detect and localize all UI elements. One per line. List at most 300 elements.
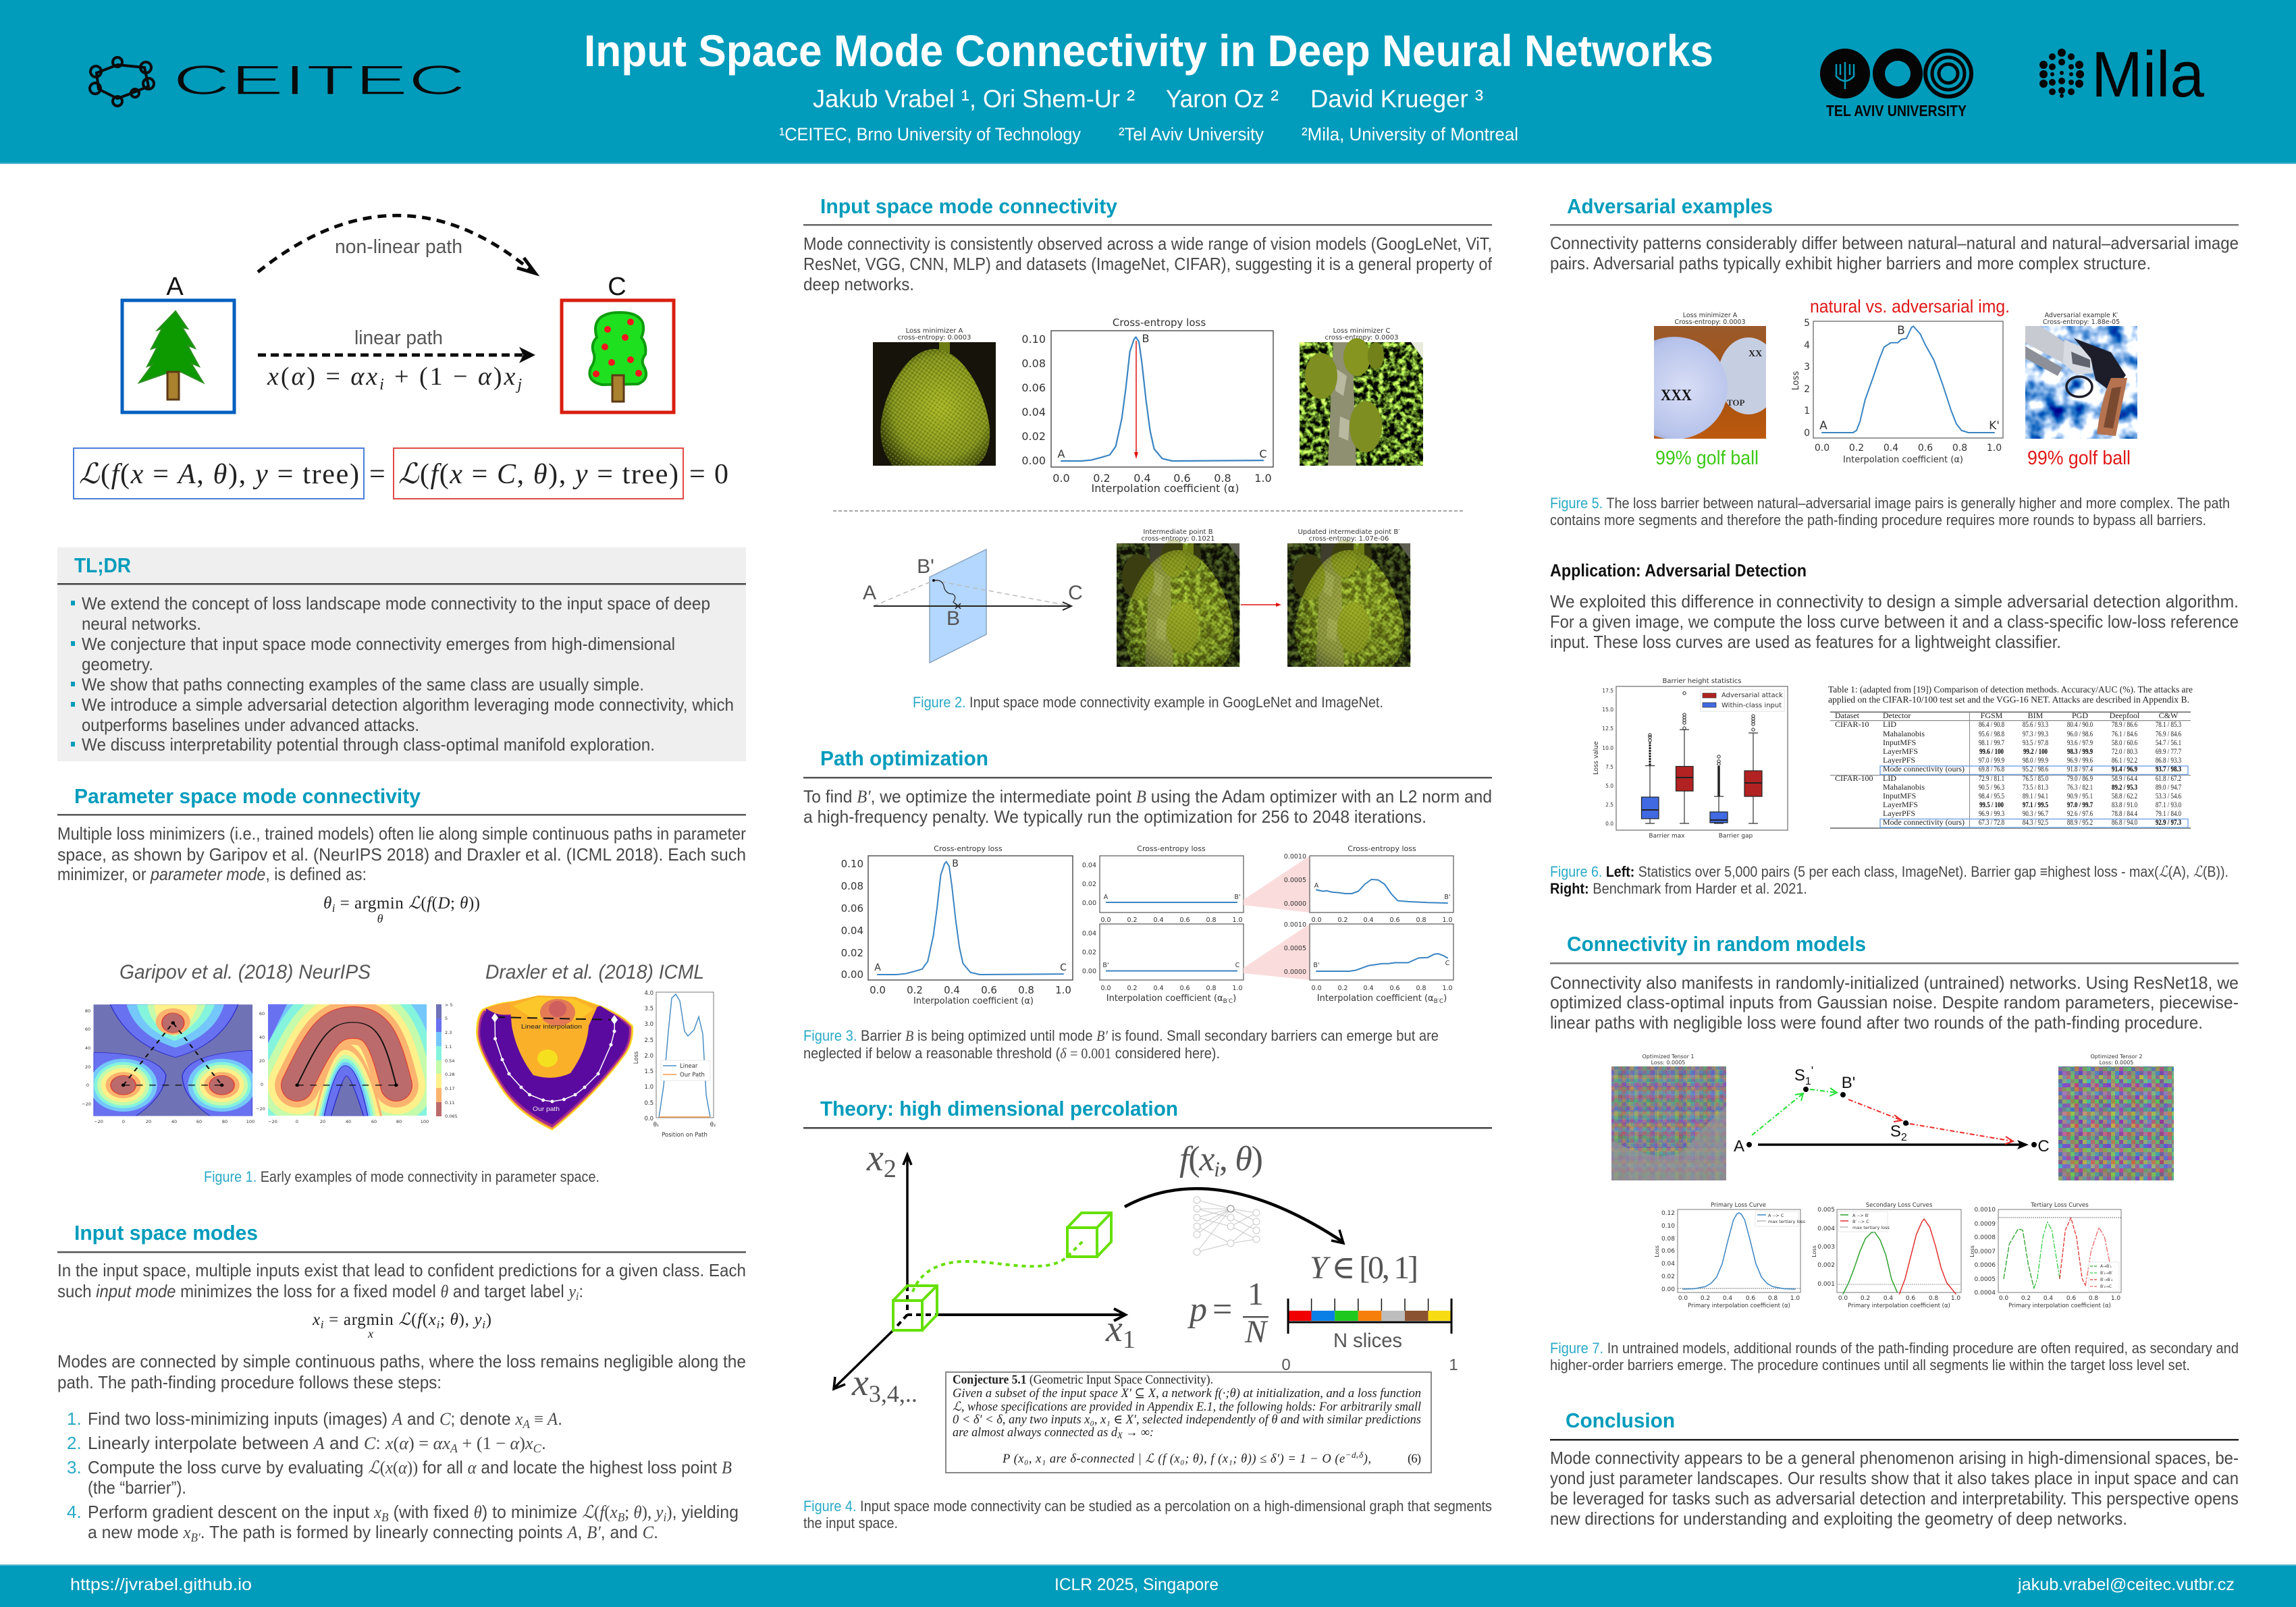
chart: Draxler loss along path: 2.5	[644, 1037, 653, 1044]
formula: interpolation: α)x	[478, 362, 515, 391]
panel: intro diagram	[74, 215, 728, 499]
conjecture box: ℒ, whose specifications are provided in Appendix E.1, the following holds: For arbitrarily small	[953, 1400, 1421, 1414]
table 1: detection methods: 86.8 / 94.0	[2112, 819, 2137, 827]
figure caption 1: Figure 1. Early examples of mode connectivity in parameter space.	[204, 1168, 599, 1185]
bullet list: We introduce a simple adversarial detection algorithm leveraging mode connectivity, which	[82, 694, 734, 715]
table 1: detection methods: 54.7 / 56.1	[2156, 739, 2181, 747]
formula: loss C: ℒ(f(x = C, θ), y = tree)	[398, 457, 678, 490]
chart: cross-entropy loss: 0.08	[1021, 357, 1046, 370]
numbered steps: A.	[548, 1409, 562, 1429]
formula: loss A: ℒ(f(x = A, θ), y = tree)	[79, 457, 359, 490]
icon: CEITEC molecule	[90, 57, 154, 106]
figure caption 5: Figure 5. The loss barrier between natural–adversarial image pairs is generally higher and more complex. The path	[1550, 495, 2230, 512]
formula: slice probability: 1	[1248, 1276, 1264, 1312]
axes	[834, 1155, 1125, 1389]
logo: Mila	[2039, 38, 2205, 111]
body text: optimized class-optimal inputs from Gaussian noise. Despite random parameters, piecewise-	[1550, 992, 2239, 1012]
numbered steps: Compute the loss curve by evaluating ℒ(x(α)) for all α and locate the highest loss point B	[88, 1457, 732, 1478]
colorbar: > 5	[445, 1002, 453, 1008]
body text: ResNet, VGG, CNN, MLP) and datasets (ImageNet, CIFAR), suggesting it is a general property of	[803, 254, 1493, 274]
numbered steps: θ) to minimize ℒ(f(x	[474, 1502, 618, 1523]
formula: input mode: i	[437, 1318, 440, 1331]
arrow: linear path	[258, 347, 535, 363]
chart: B' to C loss: 0.0	[1100, 985, 1111, 992]
figure caption 3: Figure 3. Barrier B is being optimized until mode B′ is found. Small secondary barriers can emerge but are	[803, 1027, 1439, 1044]
table 1: detection methods: 79.1 / 84.0	[2156, 810, 2181, 818]
chart: zoomed A to B': Cross-entropy loss	[1347, 844, 1416, 853]
body text: space, as shown by Garipov et al. (NeurIPS 2018) and Draxler et al. (ICML 2018). Each such	[57, 844, 746, 865]
chart: Garipov contour right: −20	[268, 1119, 277, 1124]
label: non-linear path: non-linear path	[335, 236, 462, 258]
chart: A to B' loss: 0.2	[1127, 917, 1138, 924]
table 1: detection methods: 95.2 / 98.6	[2023, 765, 2048, 773]
axis labels: 3,4,..	[869, 1380, 917, 1407]
chart: primary loss curve: 1.0	[1790, 1295, 1800, 1302]
numbered steps: (with fixed	[389, 1502, 474, 1522]
chart: A to B' loss: 0.8	[1206, 917, 1217, 924]
table 1: detection methods: 78.8 / 84.4	[2112, 810, 2137, 818]
chart: barrier height boxplot: Barrier max	[1649, 833, 1685, 840]
chart: main loss curve: 0.6	[981, 984, 997, 996]
body text	[57, 823, 746, 884]
table 1: detection methods: 88.9 / 95.2	[2067, 819, 2093, 827]
table 1: detection methods: 83.8 / 91.0	[2112, 801, 2137, 809]
table 1: detection methods: 87.1 / 93.0	[2156, 801, 2181, 809]
chart: zoomed A to B': A	[1314, 882, 1319, 890]
chart: main loss curve: 0.00	[841, 969, 863, 981]
image: golf balls: Cross-entropy: 0.0003	[1674, 319, 1746, 326]
formula: slice probability	[1187, 1276, 1269, 1350]
body text: application: For a given image, we compute the loss curve between it and a class-specific low-loss reference	[1550, 611, 2239, 632]
figure title: Draxler: Draxler et al. (2018) ICML	[485, 961, 704, 983]
table 1: detection methods: 76.9 / 84.6	[2156, 730, 2181, 738]
chart: primary loss curve: 0.02	[1661, 1274, 1675, 1280]
chart: cross-entropy loss: 0.04	[1021, 406, 1046, 418]
chart: Draxler loss along path: 0.5	[644, 1100, 653, 1107]
chart: main loss curve: 0.0	[870, 984, 886, 996]
chart: Garipov contour left: 20	[85, 1064, 90, 1070]
image: golf balls: XX	[1748, 349, 1762, 359]
numbered steps: ;	[624, 1502, 633, 1522]
figure caption 5: contains more segments and therefore the path-finding procedure requires more rounds to bypass all barriers.	[1550, 512, 2206, 528]
numbered steps: (the “barrier”).	[88, 1477, 186, 1498]
image: golf balls: Loss minimizer A	[1683, 312, 1738, 319]
label: network function: θ)	[1235, 1140, 1263, 1178]
bullet list: outperforms baselines under advanced attacks.	[82, 715, 419, 735]
diagram: plane between A and C: B	[946, 607, 960, 630]
image box C with apple tree	[562, 300, 674, 412]
chart: tertiary loss curves: 0.8	[2089, 1295, 2098, 1302]
table 1: detection methods: 98.0 / 99.9	[2023, 757, 2048, 765]
chart: zoomed A to B': 0.4	[1363, 917, 1374, 924]
figure caption 6: Figure 6. Left: Statistics over 5,000 pairs (5 per each class, ImageNet). Barrier gap ≡highest loss - max(ℒ(A), ℒ(B)).	[1550, 863, 2228, 881]
table 1: detection methods: 78.1 / 85.3	[2156, 721, 2181, 729]
table 1: detection methods: 89.0 / 94.7	[2156, 784, 2181, 792]
chart: cross-entropy loss: 1.0	[1254, 472, 1272, 485]
chart: natural vs adversarial loss: 5	[1804, 318, 1810, 329]
heading: Connectivity in random models	[1567, 932, 1866, 956]
diagram: piecewise path	[1734, 1064, 2050, 1155]
chart: barrier height boxplot: Adversarial attack	[1721, 692, 1783, 699]
chart: natural vs adversarial loss	[1791, 318, 2003, 465]
chart: primary loss curve: max tertiary loss	[1768, 1219, 1806, 1224]
image: loss minimizer A: Loss minimizer A	[906, 327, 963, 335]
chart: barrier height boxplot: 17.5	[1602, 688, 1613, 694]
numbered steps: Find two loss-minimizing inputs (images) A and C; denote x	[88, 1409, 523, 1429]
icon: neural network	[1194, 1197, 1260, 1255]
chart: natural vs adversarial loss: A	[1819, 419, 1827, 433]
chart: cross-entropy loss: 0.8	[1214, 472, 1231, 485]
numbered steps: B	[618, 1510, 624, 1524]
chart: tertiary loss curves: A→B′₁	[2100, 1264, 2112, 1269]
affiliations	[779, 124, 1518, 144]
conjecture box: Given a subset of the input space X′ ⊆ X, a network f(·;θ) at initialization, and a loss function	[953, 1387, 1421, 1400]
conjecture box: (6)	[1408, 1452, 1421, 1466]
chart: barrier height boxplot: 2.5	[1605, 802, 1613, 808]
formula: slice probability: p	[1187, 1290, 1207, 1329]
chart: barrier height boxplot: Barrier gap	[1719, 833, 1753, 840]
table 1: detection methods: LID	[1883, 773, 1896, 783]
figure title: Garipov: Garipov et al. (2018) NeurIPS	[119, 961, 371, 983]
table 1: detection methods: 99.5 / 100	[1979, 801, 2004, 809]
table 1: detection methods: 85.6 / 93.3	[2023, 721, 2048, 729]
table 1: detection methods: 58.9 / 64.4	[2112, 775, 2137, 783]
table 1: detection methods: 99.2 / 100	[2023, 748, 2048, 756]
chart: primary loss curve: 0.8	[1768, 1295, 1778, 1302]
chart: Draxler loss along path: 1.5	[644, 1068, 653, 1075]
chart: barrier height boxplot	[1593, 678, 1788, 840]
table 1: detection methods: 97.1 / 99.5	[2023, 801, 2048, 809]
body text	[57, 1260, 746, 1303]
image: loss minimizer C: cross-entropy: 0.0003	[1325, 334, 1399, 342]
panel: connectivity in random models	[1550, 932, 2239, 1373]
footer: website: https://jvrabel.github.io	[70, 1575, 252, 1594]
table 1: detection methods: LayerMFS	[1883, 746, 1918, 756]
chart: zoomed B' to C: 0.2	[1337, 985, 1348, 992]
chart: Garipov contour right: 60	[259, 1011, 265, 1016]
colorbar: 0.17	[445, 1086, 454, 1091]
diagram: plane between A and C: C	[1068, 582, 1083, 604]
axis labels: x	[852, 1362, 869, 1404]
image: optimized tensor 2: Loss: 0.0005	[2100, 1060, 2133, 1066]
table 1: detection methods: LayerPFS	[1883, 809, 1915, 818]
table 1: detection methods: 86.1 / 92.2	[2112, 757, 2137, 765]
chart: main loss curve: 0.10	[841, 858, 863, 870]
arrow: B to B'	[1241, 603, 1281, 607]
image box A with fir tree	[122, 300, 234, 412]
body text: modes	[57, 1351, 746, 1392]
chart: A to B' loss: B'	[1234, 894, 1241, 901]
chart: primary loss curve: Primary interpolation coefficient (α)	[1688, 1303, 1790, 1309]
body text: pairs. Adversarial paths typically exhibit higher barriers and more complex structure.	[1550, 253, 2151, 273]
chart: main loss curve: C	[1060, 962, 1067, 973]
chart: Garipov contour right: 100	[421, 1119, 429, 1124]
equals sign: =	[369, 459, 385, 490]
image: loss minimizer A	[873, 327, 996, 466]
chart: Garipov contour left	[82, 1004, 256, 1124]
table 1: detection methods: 93.7 / 98.3	[2156, 765, 2181, 773]
bullet list: neural networks.	[82, 614, 201, 634]
numbered steps: Linearly interpolate between A and C: x(α) = αx	[88, 1433, 450, 1453]
numbered steps: . The path is formed by linearly connecting points	[201, 1522, 567, 1542]
image: golf balls: XXX	[1661, 387, 1692, 404]
body text: Connectivity patterns considerably differ between natural–natural and natural–adversarial image	[1550, 233, 2239, 253]
chart: natural vs adversarial loss: 1.0	[1987, 443, 2002, 454]
formula: input mode: x	[367, 1327, 373, 1340]
table 1: detection methods: C&W	[2159, 711, 2179, 720]
chart: main loss curve: 0.4	[944, 984, 960, 996]
formula: interpolation: j	[515, 376, 522, 393]
figure caption 3: neglected if below a reasonable threshold (δ = 0.001 considered here).	[803, 1045, 1220, 1062]
table 1: detection methods: 97.3 / 99.3	[2023, 730, 2048, 738]
colorbar: 0.065	[445, 1114, 458, 1119]
chart: A to B' loss: 0.6	[1179, 917, 1190, 924]
table 1: detection methods: 89.1 / 94.1	[2023, 792, 2048, 800]
chart: secondary loss curves: 0.0	[1838, 1295, 1848, 1302]
heading: Parameter space mode connectivity	[74, 784, 421, 808]
diagram: piecewise path: C	[2037, 1137, 2050, 1155]
chart: barrier height boxplot: 10.0	[1602, 745, 1613, 751]
table 1: detection methods: 78.9 / 86.6	[2112, 721, 2137, 729]
chart: A to B' loss: 0.04	[1082, 862, 1096, 869]
chart: B' to C loss: 0.2	[1127, 985, 1138, 992]
chart: tertiary loss curves: 0.0008	[1974, 1234, 1996, 1241]
chart: Draxler loss along path: 4.0	[644, 990, 653, 997]
table 1: detection methods: Mahalanobis	[1883, 782, 1925, 792]
diagram: piecewise path: 2	[1901, 1132, 1907, 1143]
diagram: piecewise path: '	[1907, 1120, 1909, 1134]
image: intermediate point B	[1117, 528, 1240, 667]
panel: input space modes	[57, 1221, 746, 1544]
diagram: piecewise path: S	[1890, 1122, 1901, 1141]
diagram: piecewise path: S	[1794, 1066, 1805, 1085]
figure caption 7: higher-order barriers emerge. The procedure continues until all segments lie within the target loss level set.	[1550, 1357, 2190, 1373]
numbered steps: θ), y	[633, 1502, 664, 1522]
chart: Garipov contour left: 0	[122, 1119, 125, 1124]
numbered steps: Perform gradient descent on the input x	[88, 1502, 382, 1522]
body text: yond just parameter landscapes. Our results show that it also takes place in input space and can	[1550, 1468, 2239, 1488]
conjecture box: −dₓδ	[1345, 1450, 1364, 1460]
chart: secondary loss curves: max tertiary loss	[1852, 1225, 1890, 1230]
chart: zoomed A to B': 0.8	[1416, 917, 1426, 924]
header band	[0, 0, 2296, 164]
chart: natural vs adversarial loss: 0.6	[1918, 443, 1933, 454]
formula: input mode: i	[482, 1318, 485, 1331]
table 1: detection methods: 72.0 / 80.3	[2112, 748, 2137, 756]
chart: main loss curve: 0.08	[841, 880, 863, 892]
chart: main loss curve: B	[952, 859, 959, 869]
table 1: detection methods: 98.3 / 99.9	[2067, 748, 2093, 756]
image: optimized tensor 2: Optimized Tensor 2	[2090, 1054, 2143, 1060]
table 1: detection methods: 69.8 / 76.8	[1979, 765, 2004, 773]
table 1: detection methods: Detector	[1883, 711, 1911, 720]
numbered steps: B′	[191, 1531, 201, 1544]
logo: Tel Aviv University	[1820, 49, 1971, 119]
numbered steps: 3.	[67, 1457, 82, 1477]
label: network function: i	[1214, 1157, 1220, 1181]
formula: parameter mode: i	[332, 902, 336, 915]
chart: A to B' loss: A	[1104, 894, 1109, 901]
chart: barrier height boxplot: 12.5	[1602, 726, 1613, 732]
image: loss minimizer C: Loss minimizer C	[1333, 327, 1390, 335]
table 1: detection methods: applied on the CIFAR-10/100 test set and the VGG-16 NET. Attacks are described in Appendix B.	[1828, 695, 2189, 705]
table 1: detection methods: 98.4 / 95.5	[1979, 792, 2004, 800]
table 1: detection methods: 86.8 / 93.3	[2156, 757, 2181, 765]
chart: secondary loss curves: Loss	[1811, 1245, 1817, 1257]
arrow: non-linear path	[258, 215, 535, 273]
numbered steps: i	[663, 1510, 666, 1524]
chart: natural vs adversarial loss: 2	[1804, 384, 1810, 395]
figure caption 5	[1550, 495, 2230, 528]
table 1: detection methods: Mode connectivity (ours)	[1883, 817, 1965, 827]
image: intermediate point B: Intermediate point B	[1143, 528, 1213, 536]
chart: primary loss curve: 0.6	[1746, 1295, 1755, 1302]
chart: barrier height boxplot: Barrier height statistics	[1663, 678, 1741, 685]
chart: zoomed B' to C: Interpolation coefficient (α	[1317, 993, 1434, 1004]
chart: tertiary loss curves: 0.0004	[1974, 1290, 1996, 1297]
label: output range: Y ∈ [0, 1]	[1310, 1250, 1418, 1286]
chart: Draxler landscape: Linear interpolation	[521, 1023, 582, 1031]
chart: Garipov contour right	[256, 1004, 429, 1124]
formula: input mode: ℒ(f(x	[398, 1309, 436, 1329]
chart: B' to C loss: 0.00	[1082, 968, 1096, 975]
chart: cross-entropy loss: B	[1142, 332, 1149, 345]
bullet list: We show that paths connecting examples of the same class are usually simple.	[82, 674, 644, 694]
chart: primary loss curve: 0.00	[1661, 1286, 1675, 1293]
heading: Conclusion	[1566, 1409, 1675, 1432]
formula: interpolation: + (1 −	[386, 362, 476, 391]
figure caption 2: Figure 2. Input space mode connectivity example in GoogLeNet and ImageNet.	[913, 694, 1383, 711]
formula: parameter mode	[323, 893, 480, 925]
chart: Draxler landscape	[476, 996, 633, 1131]
equals zero: = 0	[689, 459, 728, 490]
chart: B' to C loss: 0.04	[1082, 930, 1096, 937]
chart: B' to C loss: C	[1235, 962, 1240, 969]
chart: zoomed A to B': 1.0	[1442, 917, 1453, 924]
colorbar: 1.1	[445, 1044, 452, 1050]
chart: natural vs adversarial loss: 1	[1804, 406, 1810, 416]
chart: tertiary loss curves: 0.4	[2044, 1295, 2053, 1302]
authors: Yaron Oz ²	[1166, 85, 1279, 113]
chart: zoomed B' to C: B′C	[1434, 998, 1443, 1005]
conjecture box: → ∞:	[1123, 1426, 1154, 1440]
table 1: detection methods: 76.1 / 84.6	[2112, 730, 2137, 738]
chart: Garipov contour left: −20	[82, 1101, 91, 1107]
chart: main loss curve: 0.8	[1018, 984, 1034, 996]
table 1: detection methods: 91.4 / 96.9	[2112, 765, 2137, 773]
chart: zoomed B' to C: C	[1445, 960, 1450, 967]
chart: B' to C loss: B'	[1102, 962, 1109, 969]
chart: Garipov contour left: 80	[85, 1008, 90, 1014]
chart: secondary loss curves: 0.2	[1861, 1295, 1870, 1302]
image: golf balls	[1654, 312, 1766, 439]
table 1: detection methods: 58.0 / 60.6	[2112, 739, 2137, 747]
chart: barrier height boxplot: 7.5	[1605, 764, 1613, 770]
chart: barrier height boxplot: Loss value	[1593, 741, 1600, 775]
panel: path optimization	[803, 746, 1492, 1062]
table 1: detection methods: LayerMFS	[1883, 800, 1918, 809]
chart: Garipov contour left: 20	[146, 1119, 151, 1124]
chart: barrier height boxplot: 0.0	[1605, 821, 1613, 827]
table 1: detection methods: LID	[1883, 719, 1896, 729]
zoom wedges	[1244, 856, 1310, 980]
chart: secondary loss curves: 0.002	[1817, 1262, 1835, 1269]
formula: input mode: θ), y	[450, 1311, 482, 1329]
chart: main loss curve: Cross-entropy loss	[934, 844, 1003, 853]
chart: zoomed B' to C: 0.0010	[1284, 921, 1306, 929]
panel: conclusion	[1550, 1409, 2239, 1529]
chart: zoomed B' to C: B'	[1313, 962, 1320, 969]
diagram: plane between A and C: A	[863, 582, 876, 604]
body text: To find B′, we optimize the intermediate point B using the Adam optimizer with an L2 norm and	[803, 786, 1492, 807]
subheading: application: Application: Adversarial Detection	[1550, 560, 1807, 580]
formula: input mode: x	[312, 1311, 320, 1329]
conjecture box: ),	[1363, 1452, 1371, 1466]
chart: secondary loss curves: 0.004	[1817, 1226, 1835, 1232]
numbered steps: α)x	[510, 1434, 533, 1453]
conjecture box: P (x₀, x₁ are δ-connected | ℒ (f (x₀; θ), f (x₁; θ)) ≤ δ′) = 1 − O (e	[1003, 1452, 1345, 1466]
table 1: detection methods: 96.9 / 99.6	[2067, 757, 2093, 765]
conjecture box: are almost always connected as d	[953, 1426, 1121, 1440]
chart: Draxler landscape: Our path	[533, 1106, 560, 1113]
chart: zoomed B' to C: 0.8	[1416, 985, 1426, 992]
diagram: piecewise path: 1	[1805, 1076, 1811, 1087]
table 1: detection methods: Table 1: (adapted from [19]) Comparison of detection methods. Accuracy/AUC (%). The attacks are	[1828, 685, 2193, 695]
formula: input mode: )	[486, 1311, 491, 1329]
table 1: detection methods: 76.3 / 82.1	[2067, 784, 2093, 792]
chart: Draxler loss along path: Position on Path	[662, 1132, 708, 1139]
chart: primary loss curve: Loss	[1654, 1245, 1660, 1257]
authors: David Krueger ³	[1310, 85, 1483, 113]
chart: primary loss curve: 0.12	[1661, 1210, 1675, 1217]
chart: N slices bar	[1281, 1299, 1458, 1374]
chart: Garipov contour right: 60	[371, 1119, 377, 1124]
body text: modes: Modes are connected by simple continuous paths, where the loss remains negligible along the	[57, 1351, 746, 1371]
formula: parameter mode: ℒ(f(D; θ))	[408, 893, 480, 913]
chart: Draxler loss along path: Linear	[680, 1063, 698, 1070]
bullet list: We discuss interpretability potential through class-optimal manifold exploration.	[82, 734, 655, 755]
body text: application: input. These loss curves are used as features for a lightweight classifier.	[1550, 632, 2061, 652]
chart: secondary loss curves: A --> B′	[1852, 1213, 1869, 1218]
formula: slice probability: N	[1244, 1314, 1269, 1350]
axis labels: 1	[1123, 1326, 1136, 1354]
chart: Garipov contour right: −20	[256, 1106, 265, 1112]
formula: input mode: i	[321, 1318, 324, 1331]
table 1: detection methods: InputMFS	[1883, 791, 1916, 800]
chart: tertiary loss curves: 0.0010	[1974, 1207, 1996, 1214]
chart: cross-entropy loss	[1021, 317, 1273, 495]
table 1: detection methods: Deepfool	[2110, 711, 2140, 720]
chart: secondary loss curves: B′ --> C	[1852, 1219, 1869, 1224]
chart: Draxler loss along path: 3.5	[644, 1006, 653, 1012]
colorbar: 0.28	[445, 1072, 454, 1077]
formula: input mode	[312, 1309, 491, 1340]
table 1: detection methods: InputMFS	[1883, 738, 1916, 747]
body text: application: We exploited this difference in connectivity to design a simple adversarial detection algorithm.	[1550, 591, 2239, 611]
chart: tertiary loss curves: 0.6	[2066, 1295, 2076, 1302]
chart: B' to C loss: B′C	[1223, 998, 1233, 1005]
chart: zoomed B' to C: )	[1443, 993, 1447, 1004]
panel: adversarial examples	[1550, 194, 2239, 897]
body text: such input mode minimizes the loss for a fixed model θ and target label y	[57, 1281, 577, 1301]
logo: CEITEC	[90, 57, 466, 106]
chart: tertiary loss curves: B′→B′₂	[2100, 1278, 2113, 1282]
colorbar: 2.3	[445, 1030, 452, 1035]
chart: cross-entropy loss: 0.06	[1021, 381, 1046, 394]
conjecture box: 0 < δ′ < δ, any two inputs x₀, x₁ ∈ X′, selected independently of θ and with similar predictions	[953, 1413, 1421, 1427]
body text: new directions for understanding and exploiting the geometry of deep networks.	[1550, 1508, 2127, 1529]
table 1: detection methods: BIM	[2028, 711, 2044, 720]
